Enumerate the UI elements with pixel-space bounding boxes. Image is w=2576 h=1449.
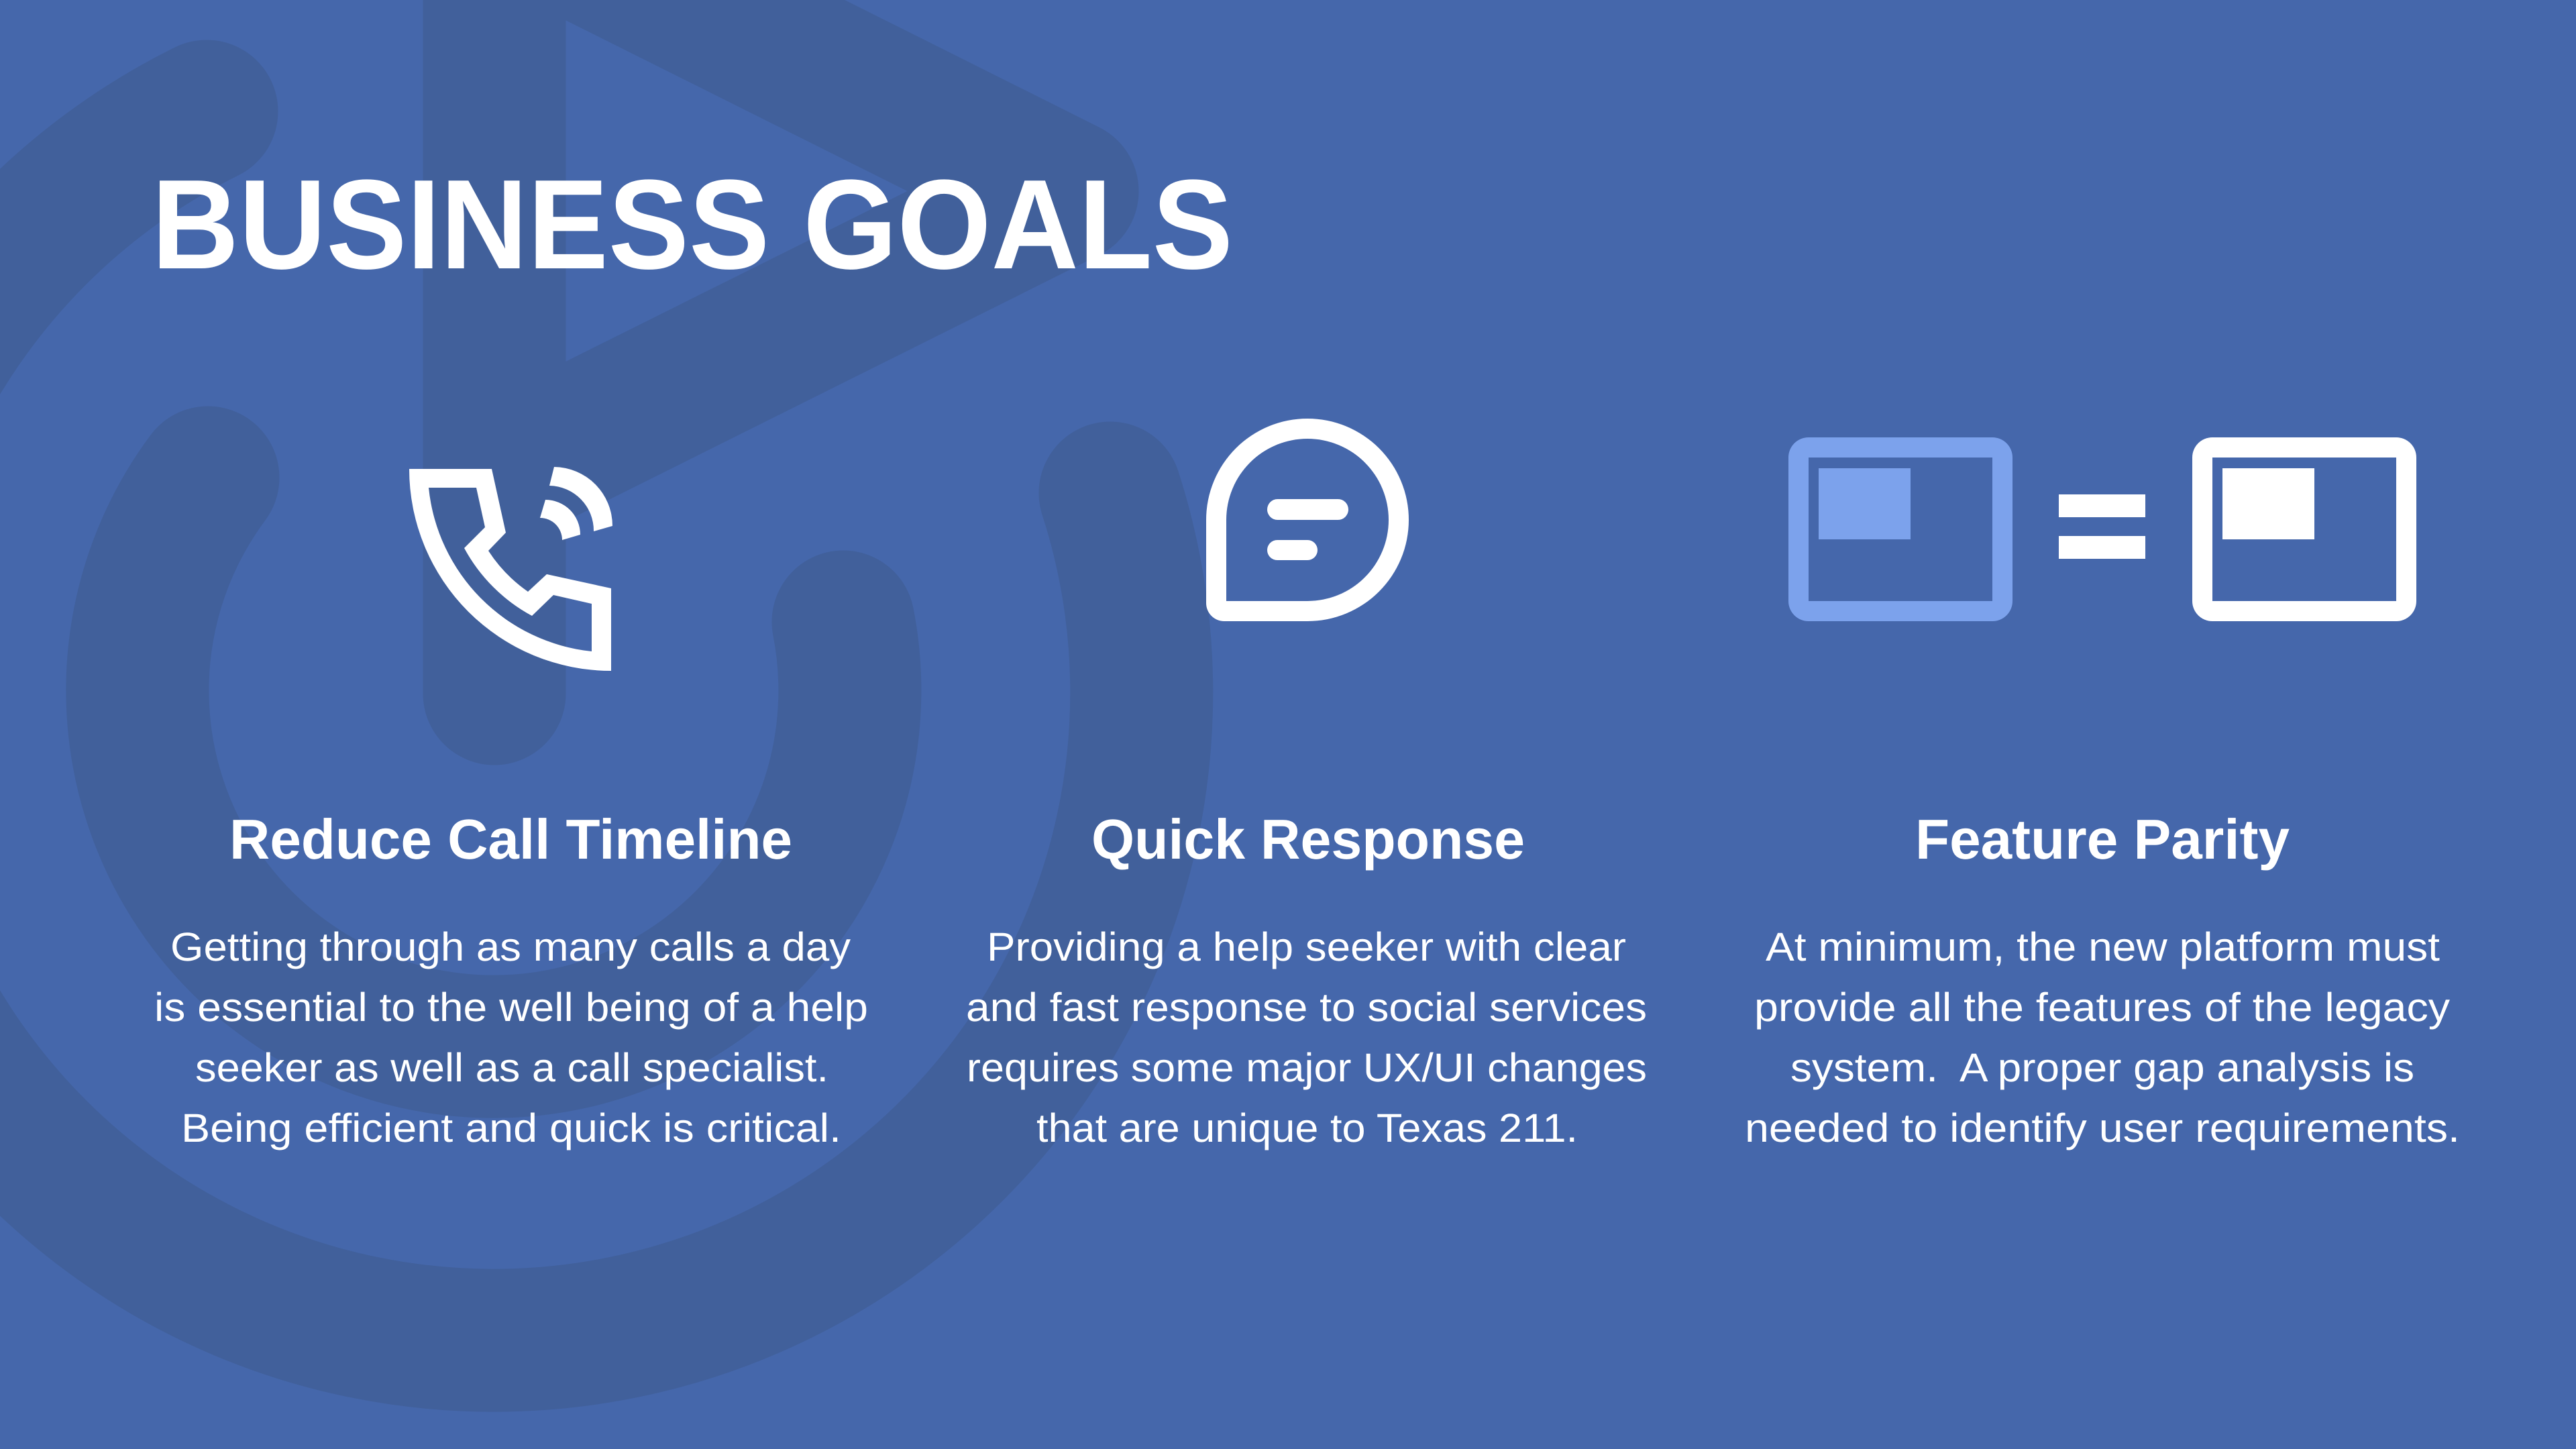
- icon: new screen: [2192, 437, 2416, 621]
- icon: phone with signal waves: [409, 467, 612, 671]
- text block: feature parity: needed to identify user requirements.: [1745, 1106, 2460, 1150]
- text block: reduce call timeline: [154, 924, 868, 1150]
- text block: quick response: that are unique to Texas 211.: [1036, 1106, 1578, 1150]
- text block: quick response: and fast response to social services: [966, 985, 1647, 1030]
- text block: reduce call timeline: Getting through as many calls a day: [170, 924, 851, 969]
- text block: feature parity: [1745, 924, 2460, 1150]
- panel: reduce call timeline: [154, 467, 868, 1150]
- text block: feature parity: system. A proper gap analysis is: [1790, 1045, 2414, 1090]
- text block: reduce call timeline: seeker as well as a call specialist.: [195, 1045, 828, 1090]
- title: BUSINESS GOALS: [152, 154, 1233, 296]
- icon: equals sign: [2059, 494, 2145, 559]
- text block: feature parity: At minimum, the new platform must: [1766, 924, 2440, 969]
- text block: quick response: requires some major UX/UI changes: [967, 1045, 1647, 1090]
- icon: tablet equals tablet: [1788, 437, 2416, 621]
- heading: reduce call timeline: Reduce Call Timeline: [229, 808, 792, 871]
- heading: feature parity: Feature Parity: [1915, 808, 2290, 871]
- text block: feature parity: provide all the features of the legacy: [1754, 985, 2450, 1030]
- text block: reduce call timeline: is essential to the well being of a help: [154, 985, 868, 1030]
- panel: quick response: [966, 419, 1647, 1150]
- background watermark logo: [0, 0, 1142, 1340]
- text block: reduce call timeline: Being efficient and quick is critical.: [181, 1106, 841, 1150]
- panel: feature parity: [1745, 437, 2460, 1150]
- text block: quick response: [966, 924, 1647, 1150]
- text block: quick response: Providing a help seeker with clear: [987, 924, 1626, 969]
- icon: speech bubble: [1206, 419, 1409, 621]
- heading: quick response: Quick Response: [1091, 808, 1525, 871]
- icon: legacy screen: [1788, 437, 2012, 621]
